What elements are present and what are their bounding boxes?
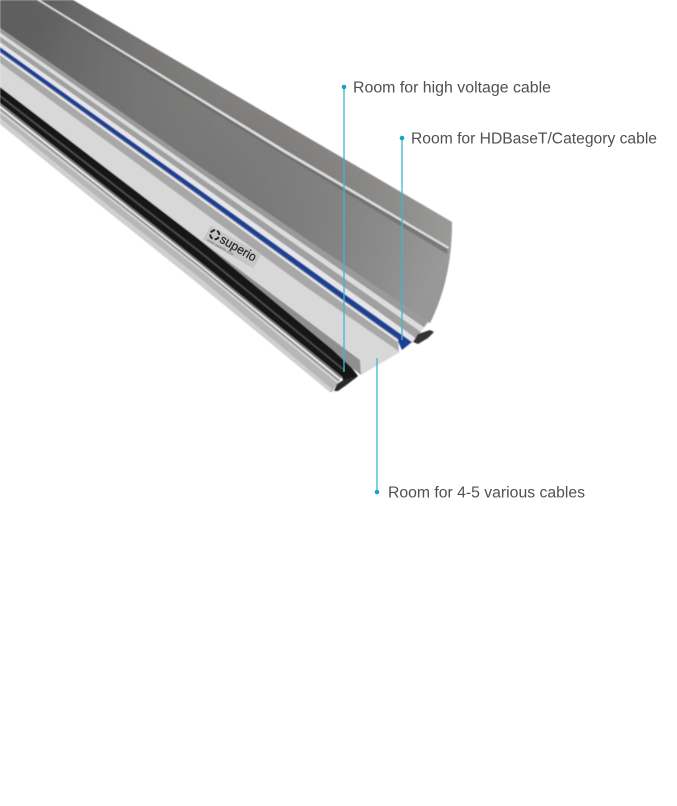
label: Room for high voltage cable: [353, 80, 551, 96]
duct: aluminium profile: [0, 0, 452, 392]
lower rail: [0, 103, 342, 392]
light tray: [0, 63, 400, 375]
upper rail end cap: [413, 330, 434, 344]
cable highlight: [0, 95, 345, 371]
label: Room for 4-5 various cables: [388, 484, 585, 502]
leader line: [343, 87, 345, 372]
rail end cap: [334, 377, 357, 391]
blue channel: [0, 47, 412, 350]
upper ridge: [0, 28, 428, 344]
dot: [375, 490, 379, 494]
black cables: [0, 87, 358, 386]
top lip highlight: [37, 0, 449, 249]
superio sticker: [203, 225, 262, 268]
back panel: [0, 0, 452, 323]
dot: [400, 136, 404, 140]
top lip shadow: [30, 0, 448, 254]
callout: high voltage cable: [342, 80, 551, 372]
grey fin band: [0, 52, 399, 352]
leader line: [401, 138, 403, 340]
callout: HDBaseT/Category cable: [400, 130, 657, 340]
logo mark: [209, 229, 221, 241]
logo url: www.superio.com: [206, 238, 234, 256]
leader line: [376, 358, 378, 492]
callout: 4-5 various cables: [375, 358, 585, 502]
dot: [342, 85, 346, 89]
white edge under blue: [0, 53, 398, 342]
label: Room for HDBaseT/Category cable: [411, 130, 657, 148]
logo text: superio: [217, 232, 259, 264]
front fin: [200, 240, 361, 375]
